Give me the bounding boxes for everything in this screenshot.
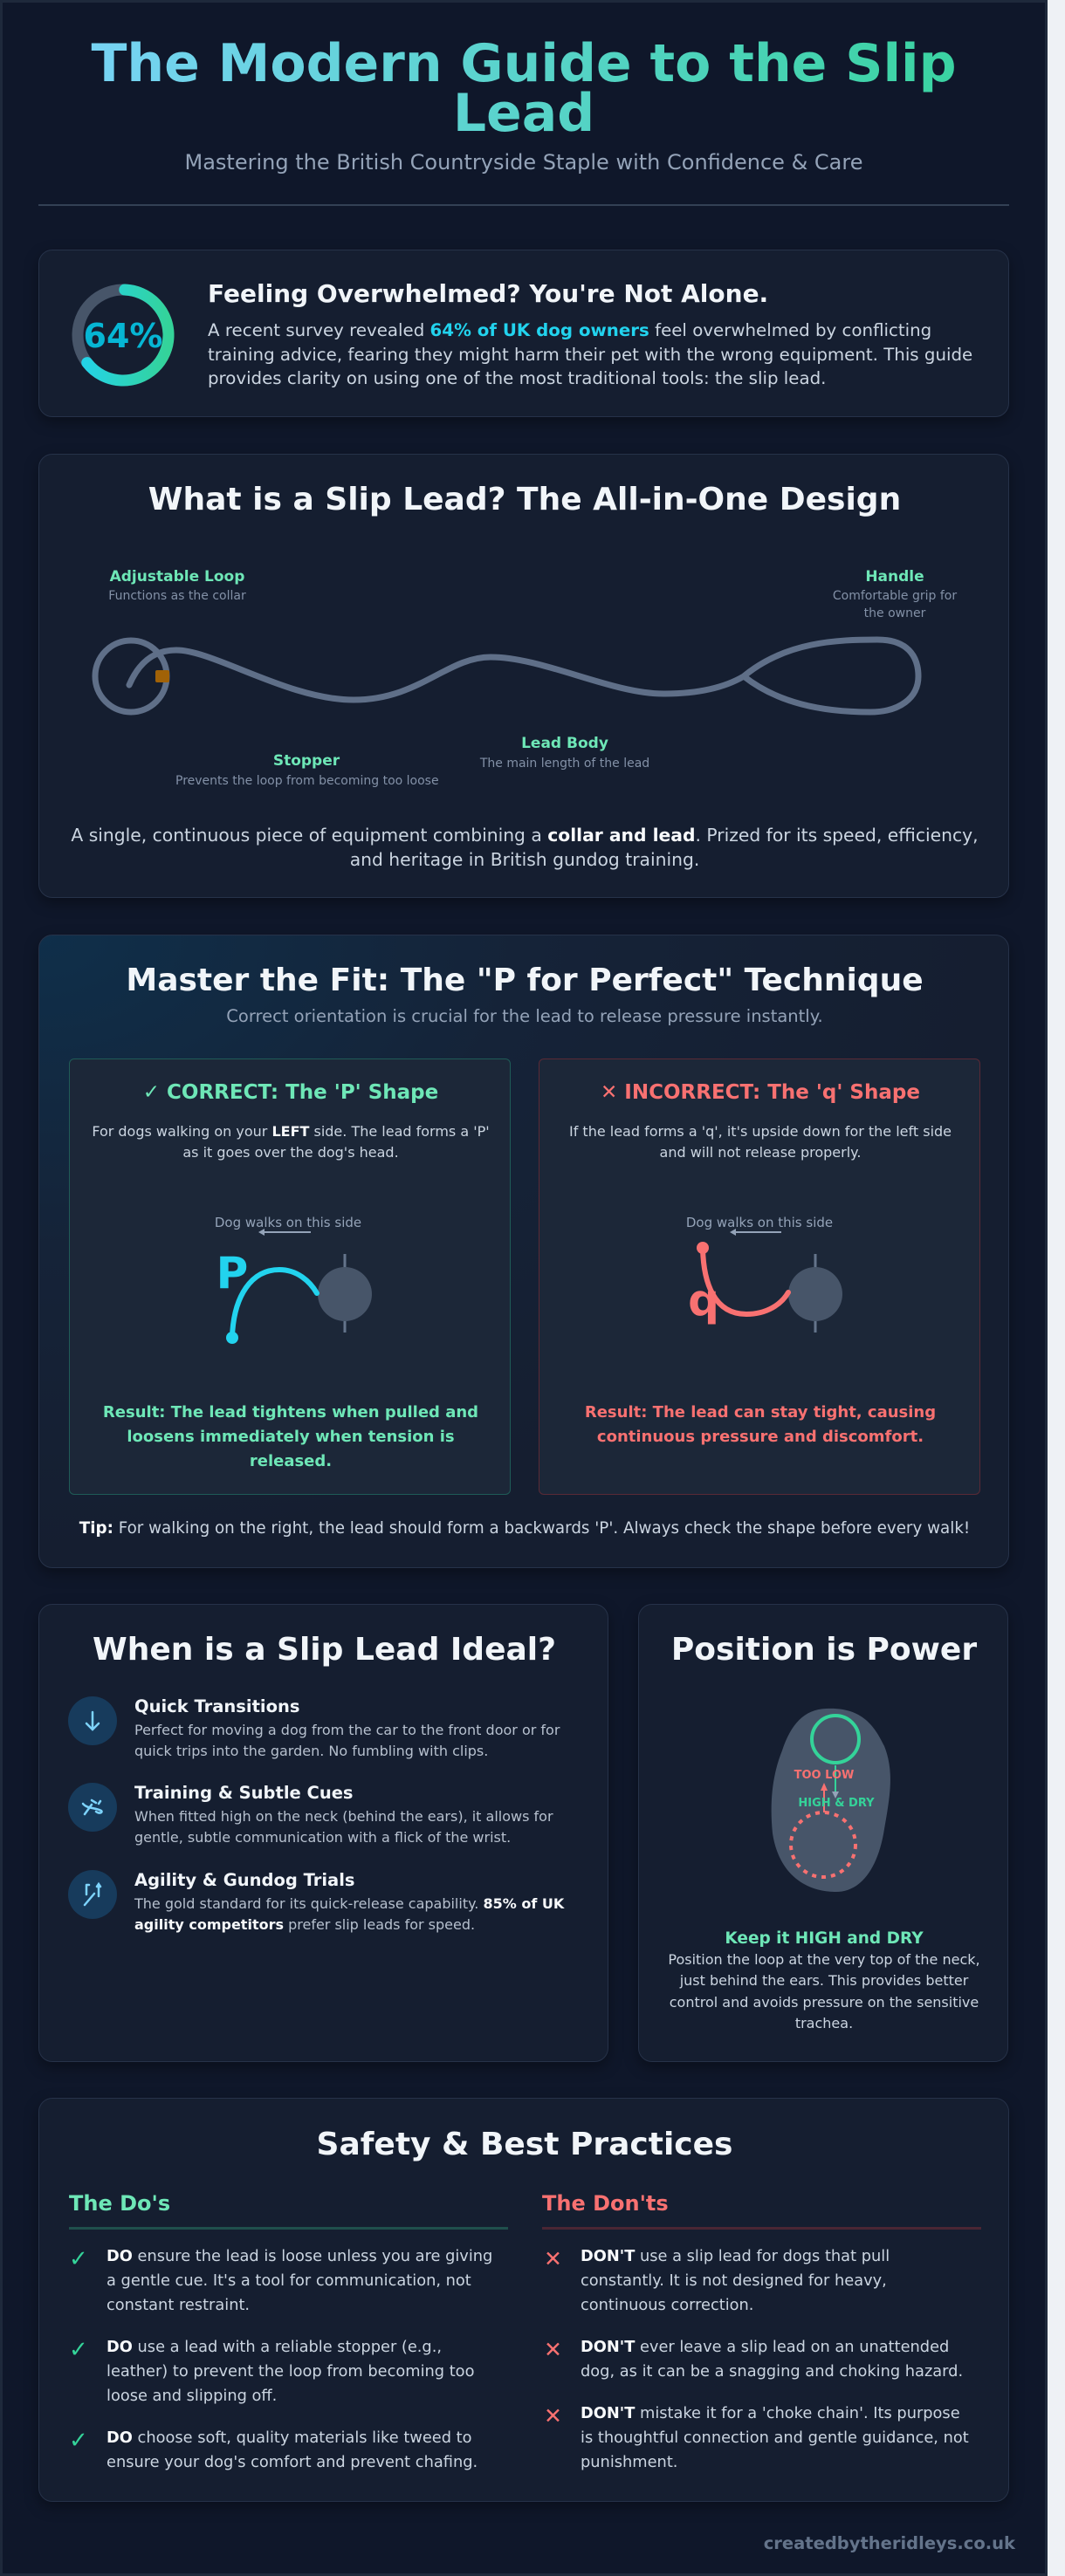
body text [208, 320, 972, 388]
item: agility [68, 1870, 565, 1933]
diagram: P shape: Dog walks on this side [215, 1215, 361, 1230]
do item 3: DO choose soft, quality materials like tweed to [106, 2429, 471, 2447]
panel: P for perfect [38, 935, 1009, 1568]
result: Result: The lead tightens when pulled and [103, 1403, 478, 1422]
panel: position is power [638, 1604, 1008, 2062]
dont item 1 [544, 2246, 890, 2314]
label: lead body: Lead Body [521, 735, 608, 752]
result [103, 1403, 478, 1470]
body text: provides clarity on using one of the most traditional tools: the slip lead. [208, 368, 826, 388]
subtitle: Correct orientation is crucial for the lead to release pressure instantly. [226, 1006, 823, 1026]
do item 1 [69, 2246, 492, 2314]
dont item 1: ✕ [544, 2246, 562, 2271]
body text: A recent survey revealed 64% of UK dog owners feel overwhelmed by conflicting [208, 320, 931, 340]
diagram: q shape [686, 1215, 842, 1333]
result: continuous pressure and discomfort. [597, 1428, 924, 1446]
do item 1: constant restraint. [106, 2296, 250, 2314]
dont item 2: DON'T ever leave a slip lead on an unattended [581, 2338, 949, 2356]
description: A single, continuous piece of equipment combining a collar and lead. Prized for its speed, efficiency, [71, 825, 979, 846]
diagram: q shape: q [688, 1275, 719, 1326]
donut chart 64%: 64% [84, 317, 162, 355]
title: The Modern Guide to the Slip [91, 33, 957, 94]
panel: correct [69, 1058, 511, 1495]
panel: what is a slip lead [38, 454, 1009, 898]
item: training: gentle, subtle communication with a flick of the wrist. [134, 1829, 511, 1846]
item: training [68, 1783, 553, 1846]
description [92, 1123, 490, 1161]
heading: What is a Slip Lead? The All-in-One Design [148, 482, 901, 517]
item: agility: The gold standard for its quick-release capability. 85% of UK [134, 1895, 564, 1912]
icon: arrow down [68, 1696, 117, 1745]
icon: agility [68, 1870, 117, 1919]
do item 2: leather) to prevent the loop from becoming too [106, 2362, 474, 2381]
label: adjustable loop: Adjustable Loop [110, 568, 244, 586]
heading: Master the Fit: The "P for Perfect" Technique [126, 963, 924, 998]
column: do's: The Do's [69, 2191, 170, 2216]
column: do's [69, 2191, 508, 2471]
label: adjustable loop: Functions as the collar [108, 589, 246, 603]
dont item 3: punishment. [581, 2453, 677, 2471]
heading: Position is Power [671, 1632, 977, 1668]
item: quick transitions: Perfect for moving a dog from the car to the front door or for [134, 1722, 560, 1738]
footer: createdbytheridleys.co.uk [764, 2533, 1015, 2553]
item: training: When fitted high on the neck (behind the ears), it allows for [134, 1808, 553, 1825]
item: quick transitions: quick trips into the garden. No fumbling with clips. [134, 1743, 488, 1759]
panel: safety [38, 2098, 1009, 2502]
diagram: P shape: P [216, 1248, 248, 1298]
item: training: Training & Subtle Cues [134, 1783, 354, 1803]
donut chart 64% [72, 284, 175, 386]
column: don'ts: The Don'ts [542, 2191, 669, 2216]
diagram: neck position: TOO LOW [794, 1769, 854, 1782]
do item 3: ✓ [69, 2428, 88, 2454]
heading: Safety & Best Practices [317, 2127, 732, 2162]
label: handle: Comfortable grip for [833, 589, 957, 603]
dont item 1: constantly. It is not designed for heavy, [581, 2271, 887, 2290]
label: stopper: Prevents the loop from becoming too loose [175, 774, 439, 788]
item: agility: Agility & Gundog Trials [134, 1870, 355, 1890]
dont item 1: continuous correction. [581, 2296, 753, 2314]
tip: Tip: For walking on the right, the lead should form a backwards 'P'. Always check the shape before every walk! [79, 1519, 970, 1538]
caption: just behind the ears. This provides better [680, 1972, 968, 1989]
label: handle: the owner [864, 606, 925, 620]
result: released. [250, 1452, 332, 1470]
diagram: P shape [215, 1215, 372, 1344]
panel: when is a slip lead ideal [38, 1604, 608, 2062]
diagram: slip lead [93, 637, 922, 716]
item: quick transitions [68, 1696, 560, 1759]
item: quick transitions: Quick Transitions [134, 1696, 299, 1716]
icon: training cue [68, 1783, 117, 1832]
result: loosens immediately when tension is [127, 1428, 455, 1446]
do item 1: ✓ [69, 2246, 88, 2272]
result: Result: The lead can stay tight, causing [585, 1403, 936, 1422]
description: and will not release properly. [660, 1144, 861, 1161]
do item 1: a gentle cue. It's a tool for communication, not [106, 2271, 471, 2290]
label: lead body: The main length of the lead [480, 757, 649, 771]
diagram: neck position [772, 1709, 890, 1892]
label: stopper [175, 752, 439, 788]
result [585, 1403, 936, 1446]
dont item 2 [544, 2337, 963, 2381]
title [0, 39, 1048, 139]
dont item 3: ✕ [544, 2403, 562, 2429]
label: lead body [480, 735, 649, 771]
description: If the lead forms a 'q', it's upside down for the left side [569, 1123, 952, 1140]
label: handle: Handle [865, 568, 924, 586]
do item 3 [69, 2428, 478, 2471]
description [71, 825, 979, 870]
description: as it goes over the dog's head. [182, 1144, 399, 1161]
heading: When is a Slip Lead Ideal? [93, 1632, 556, 1668]
caption: trachea. [795, 2015, 853, 2031]
description [569, 1123, 952, 1161]
dont item 3: DON'T mistake it for a 'choke chain'. Its purpose [581, 2404, 960, 2422]
title: Lead [453, 83, 594, 144]
panel: incorrect [539, 1058, 980, 1495]
dont item 3 [544, 2403, 969, 2471]
dont item 2: ✕ [544, 2337, 562, 2362]
do item 2: loose and slipping off. [106, 2387, 277, 2405]
description: and heritage in British gundog training. [350, 849, 699, 870]
caption: Position the loop at the very top of the neck, [668, 1951, 980, 1968]
do item 3: ensure your dog's comfort and prevent chafing. [106, 2453, 478, 2471]
do item 2: DO use a lead with a reliable stopper (e.g., [106, 2338, 442, 2356]
body text: training advice, fearing they might harm their pet with the wrong equipment. This guide [208, 344, 972, 365]
dont item 1: DON'T use a slip lead for dogs that pull [581, 2247, 890, 2265]
dont item 3: is thoughtful connection and gentle guidance, not [581, 2429, 969, 2447]
label: adjustable loop [108, 568, 246, 603]
label: stopper: Stopper [273, 752, 340, 770]
diagram: q shape: Dog walks on this side [686, 1215, 833, 1230]
do item 2 [69, 2337, 474, 2405]
column: don'ts [542, 2191, 981, 2471]
caption [668, 1929, 980, 2031]
description: For dogs walking on your LEFT side. The lead forms a 'P' [92, 1123, 490, 1140]
dont item 2: dog, as it can be a snagging and choking hazard. [581, 2362, 963, 2381]
item: agility: agility competitors prefer slip leads for speed. [134, 1916, 475, 1933]
diagram: neck position: HIGH & DRY [798, 1797, 875, 1810]
caption: Keep it HIGH and DRY [725, 1929, 924, 1948]
heading: Feeling Overwhelmed? You're Not Alone. [208, 279, 768, 308]
heading incorrect: ✕ INCORRECT: The 'q' Shape [601, 1081, 920, 1104]
do item 2: ✓ [69, 2337, 88, 2363]
panel: survey stat [38, 250, 1009, 417]
stopper [155, 670, 169, 682]
label: handle [833, 568, 957, 620]
caption: control and avoids pressure on the sensitive [670, 1994, 979, 2011]
subtitle: Mastering the British Countryside Staple with Confidence & Care [185, 150, 862, 175]
do item 1: DO ensure the lead is loose unless you are giving [106, 2247, 492, 2265]
heading correct: ✓ CORRECT: The 'P' Shape [143, 1081, 438, 1104]
